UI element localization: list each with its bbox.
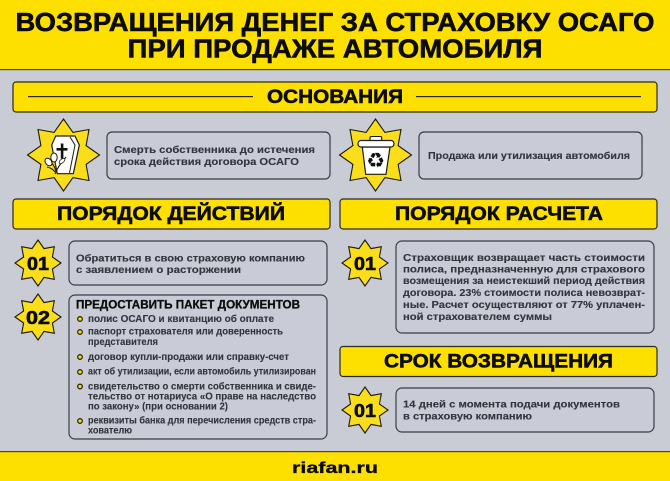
- panel: расчет: возмещения за неистекший период действия: [403, 276, 645, 287]
- panel: пакет документов: [69, 295, 327, 439]
- panel: 14 дней: в страховую компанию: [403, 412, 532, 422]
- step badge 01 right: [342, 240, 388, 286]
- panel: пакет документов: свидетельство о смерти собственника и свиде-: [88, 380, 316, 392]
- heading: срок возвращения: СРОК ВОЗВРАЩЕНИЯ: [384, 352, 613, 372]
- panel: расчет: полиса, предназначенную для страхового: [403, 264, 645, 276]
- panel: обратиться в страховую: Обратиться в свою страховую компанию: [76, 252, 305, 264]
- step badge 01 term: 01: [354, 401, 376, 421]
- panel: пакет документов: представителя: [88, 337, 158, 348]
- panel: обратиться в страховую: [69, 241, 327, 285]
- title banner: ВОЗВРАЩЕНИЯ ДЕНЕГ ЗА СТРАХОВКУ ОСАГО: [16, 9, 654, 37]
- panel: расчет: [396, 241, 654, 333]
- panel: расчет: договора. 23% стоимости полиса невозврат-: [403, 288, 645, 299]
- panel: обратиться в страховую: с заявлением о расторжении: [76, 265, 241, 276]
- panel: продажа или утилизация: Продажа или утилизация автомобиля: [428, 150, 630, 162]
- panel: смерть собственника: Смерть собственника до истечения: [114, 144, 315, 156]
- heading: порядок расчета: ПОРЯДОК РАСЧЕТА: [395, 204, 603, 225]
- panel: 14 дней: [396, 388, 654, 432]
- panel: 14 дней: 14 дней с момента подачи документов: [403, 400, 620, 410]
- panel: продажа или утилизация: [419, 132, 642, 179]
- icon: trash can star: [340, 119, 412, 191]
- panel: пакет документов: ПРЕДОСТАВИТЬ ПАКЕТ ДОКУМЕНТОВ: [76, 300, 300, 312]
- heading: основания: ОСНОВАНИЯ: [267, 87, 403, 108]
- heading: основания: [13, 82, 657, 112]
- step badge 01 left: [15, 240, 61, 286]
- footer banner: [0, 451, 670, 481]
- panel: пакет документов: реквизиты банка для перечисления средств стра-: [88, 414, 316, 426]
- panel: пакет документов: по закону» (при основании 2): [88, 402, 228, 412]
- step badge 02 left: [15, 294, 61, 340]
- panel: смерть собственника: срока действия договора ОСАГО: [114, 157, 299, 168]
- panel: пакет документов: акт об утилизации, если автомобиль утилизирован: [88, 366, 316, 378]
- heading: срок возвращения: [340, 346, 657, 376]
- heading: порядок расчета: [340, 199, 657, 229]
- icon: trash can star: ♻: [366, 148, 385, 172]
- step badge 01 right: 01: [354, 254, 376, 274]
- panel: смерть собственника: [107, 132, 330, 179]
- heading: порядок действий: ПОРЯДОК ДЕЙСТВИЙ: [57, 203, 285, 225]
- title banner: ПРИ ПРОДАЖЕ АВТОМОБИЛЯ: [128, 36, 542, 64]
- panel: пакет документов: тельство от нотариуса «О праве на наследство: [88, 392, 316, 402]
- panel: расчет: ной страхователем суммы: [403, 312, 552, 323]
- panel: расчет: ные. Расчет осуществляют от 77% уплачен-: [403, 300, 645, 311]
- panel: пакет документов: хователю: [88, 426, 132, 436]
- panel: расчет: Страховщик возвращает часть стоимости: [403, 253, 645, 264]
- title banner: [0, 0, 670, 70]
- step badge 01 term: [342, 387, 388, 433]
- step badge 01 left: 01: [27, 254, 49, 274]
- icon: coffin star: [28, 119, 100, 191]
- heading: порядок действий: [13, 199, 330, 229]
- step badge 02 left: 02: [26, 308, 50, 328]
- footer banner: riafan.ru: [292, 460, 378, 477]
- panel: пакет документов: паспорт страхователя или доверенность: [88, 327, 283, 338]
- panel: пакет документов: полис ОСАГО и квитанцию об оплате: [88, 313, 274, 325]
- panel: пакет документов: договор купли-продажи или справку-счет: [88, 352, 289, 363]
